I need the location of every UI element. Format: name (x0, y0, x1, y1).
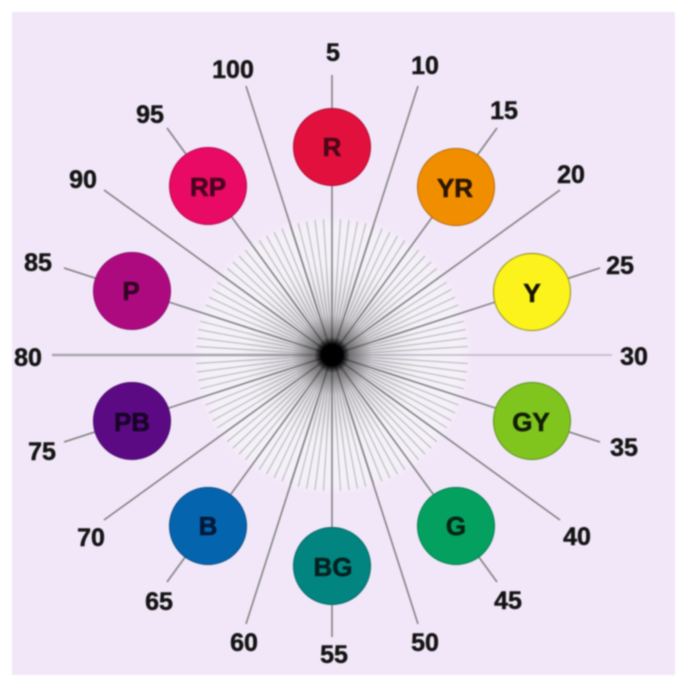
radial fine tick burst (180, 202, 484, 508)
hue number labels: 85 (24, 249, 52, 277)
hue circle: BG (294, 528, 370, 604)
hue number labels: 5 (326, 39, 340, 67)
hue number labels: 75 (28, 438, 56, 466)
hue circle: PB (94, 382, 170, 460)
hue circle: YR: YR (437, 173, 473, 203)
hue number labels: 40 (563, 523, 591, 551)
hue number labels: 90 (69, 166, 97, 194)
hue number labels: 70 (77, 524, 105, 552)
hue circle: RP: RP (190, 172, 226, 202)
major hue lines (52, 75, 612, 637)
hue number labels: 30 (620, 343, 648, 371)
hue number labels: 15 (490, 97, 518, 125)
hue circle: P (94, 252, 170, 330)
hue number labels: 45 (494, 587, 522, 615)
hue number labels: 50 (411, 629, 439, 657)
hue number labels: 100 (212, 56, 254, 84)
hue circle: G (418, 488, 494, 564)
hue circle: Y: Y (523, 278, 541, 308)
hue number labels: 60 (230, 629, 258, 657)
hue number labels: 20 (557, 161, 585, 189)
hue circle: GY (494, 382, 570, 460)
hue circle: Y (494, 254, 570, 330)
hue circle: B (170, 488, 246, 564)
hue circle: R (294, 108, 370, 186)
hue circle: R: R (323, 132, 342, 162)
hue circle: G: G (446, 511, 466, 541)
hue circle: PB: PB (114, 407, 150, 437)
hue number labels: 80 (14, 344, 42, 372)
hue number labels: 55 (320, 641, 348, 669)
hue number labels: 10 (411, 52, 439, 80)
hue number labels: 25 (606, 252, 634, 280)
hue number labels: 65 (145, 588, 173, 616)
hue circle: BG: BG (314, 552, 352, 582)
hue circle: RP (170, 148, 246, 224)
hue number labels: 95 (136, 101, 164, 129)
hue number labels: 35 (610, 434, 638, 462)
hue circle: GY: GY (512, 407, 550, 437)
hue circle: B: B (199, 511, 217, 541)
center dark hub (242, 265, 422, 445)
hue circle: YR (418, 148, 494, 226)
hue circle: P: P (122, 276, 140, 306)
